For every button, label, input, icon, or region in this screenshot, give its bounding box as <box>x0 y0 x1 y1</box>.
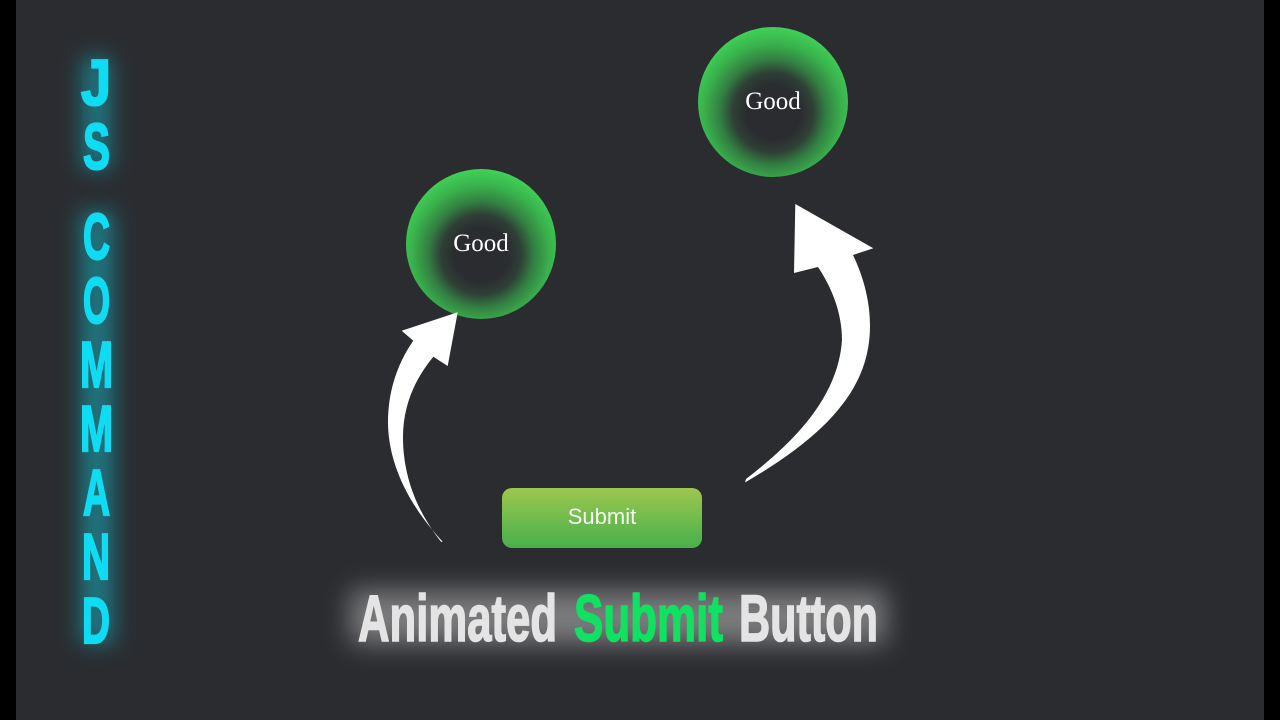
letter M: M <box>80 392 113 465</box>
heading word: Button: Button <box>739 581 878 655</box>
green circle: right <box>698 27 848 177</box>
vertical title: JS COMMAND <box>80 46 114 657</box>
green circle: left <box>406 169 556 319</box>
title glow <box>80 57 114 644</box>
heading word: Animated: Animated <box>358 581 557 655</box>
arrow: right, button to right circle <box>745 204 873 482</box>
green circle: right: Good <box>745 88 801 115</box>
letter A: A <box>83 456 110 529</box>
letter N: N <box>82 520 110 593</box>
submit button <box>502 488 702 548</box>
letter O: O <box>83 264 110 337</box>
letter S: S <box>83 110 110 183</box>
letter J: J <box>81 46 111 119</box>
letter C: C <box>83 200 110 273</box>
letter M: M <box>80 328 113 401</box>
heading glow <box>350 590 886 644</box>
letter D: D <box>82 584 110 657</box>
green circle: left: Good <box>453 230 509 257</box>
heading: Animated Submit Button <box>350 581 886 655</box>
heading word: Submit: Submit <box>574 581 723 655</box>
arrow: left, button to left circle <box>388 312 458 542</box>
submit button: Submit <box>568 504 636 529</box>
